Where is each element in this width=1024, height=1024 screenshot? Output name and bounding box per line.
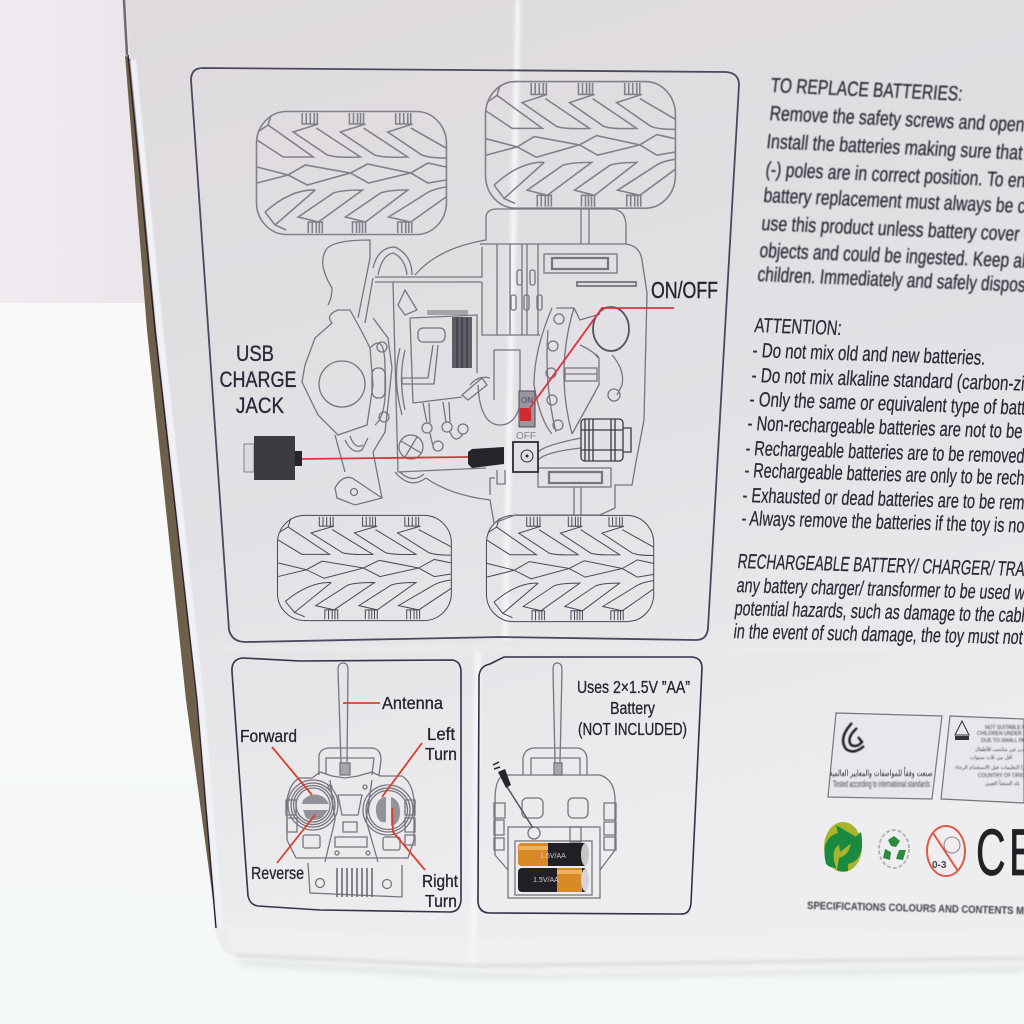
red line: usb jack	[302, 457, 468, 459]
motor	[581, 419, 631, 461]
white table surface	[0, 303, 1024, 1024]
panel: car diagram	[191, 68, 739, 642]
bullet list	[741, 339, 1024, 537]
label: tested standards	[828, 713, 942, 799]
text block: attention list	[741, 314, 1024, 537]
icon: green dot	[824, 822, 862, 872]
battery note: (NOT INCLUDED)	[578, 719, 687, 739]
label: usb charge jack: USB	[236, 341, 274, 366]
coil ring	[593, 307, 629, 351]
red line: on/off	[527, 308, 674, 412]
power switch: ON	[521, 396, 533, 405]
label: small parts warning: بلد المنشأ الصين	[985, 779, 1020, 787]
control labels: Left	[427, 724, 455, 744]
icon: warning triangle	[955, 721, 969, 740]
remote back drawing	[494, 663, 616, 898]
control labels: Antenna	[382, 693, 443, 713]
label: tested standards: صنعت وفقاً للمواصفات والمعايير العالمية	[829, 766, 933, 778]
hatched heatsink	[427, 310, 472, 368]
cardboard side edge	[124, 0, 221, 930]
label: usb charge jack: JACK	[236, 393, 284, 418]
panel frame	[191, 68, 739, 642]
remote drawing	[286, 663, 415, 897]
icon: ce mark: C	[976, 815, 1006, 889]
text block: battery instructions	[756, 74, 1024, 297]
batteries: 1.5V/AA	[540, 853, 566, 860]
label: tested standards: Tested according to international standards	[833, 779, 930, 789]
paragraph: replacement steps	[756, 102, 1024, 297]
power switch: OFF	[516, 431, 536, 442]
label: usb charge jack: CHARGE	[220, 367, 296, 392]
car chassis outline	[302, 209, 647, 523]
control labels: Forward	[240, 726, 297, 746]
panel: battery install	[478, 657, 702, 914]
screwdriver	[493, 762, 533, 828]
heading: attention: ATTENTION:	[753, 314, 843, 340]
control labels: Turn	[425, 891, 457, 911]
charge plug	[468, 447, 504, 468]
label: usb charge jack	[220, 341, 296, 418]
text block: rechargeable battery charger	[732, 550, 1024, 649]
background wall	[0, 0, 240, 305]
usb charger block	[244, 436, 302, 480]
label: small parts warning	[941, 716, 1024, 803]
icon: not for ages 0-3: 0-3	[932, 860, 947, 871]
battery note: Uses 2×1.5V ”AA”	[577, 677, 690, 697]
battery note	[577, 677, 690, 739]
batteries	[518, 843, 589, 892]
batteries: 1.5V/AA	[533, 877, 559, 884]
panel frame	[232, 658, 461, 912]
tire: bottom left	[277, 515, 451, 621]
icon: ce mark	[976, 815, 1024, 889]
control labels: Right	[422, 871, 458, 891]
power switch	[516, 391, 536, 442]
red lines: control pointers	[272, 703, 425, 870]
charging port	[513, 442, 538, 472]
panel: remote controls	[232, 658, 461, 912]
tire: bottom right	[486, 515, 654, 622]
icon: swirl logo	[843, 723, 864, 751]
shadow under box	[235, 958, 1024, 980]
icon: recycling	[879, 830, 909, 868]
box fold creases	[220, 0, 1024, 975]
control labels	[240, 693, 458, 911]
control buttons	[302, 794, 400, 826]
panel frame	[478, 657, 702, 914]
control labels: Turn	[425, 744, 457, 764]
icon: not for ages 0-3	[927, 826, 965, 876]
tire: top right	[486, 82, 675, 208]
control labels: Reverse	[251, 863, 304, 883]
label: small parts warning: أقل من ثلاث سنوات	[970, 754, 1013, 761]
label: on/off: ON/OFF	[651, 277, 718, 303]
heading: to replace batteries: TO REPLACE BATTERIES:	[769, 74, 964, 106]
tire: top left	[257, 112, 446, 234]
battery note: Battery	[610, 698, 655, 718]
